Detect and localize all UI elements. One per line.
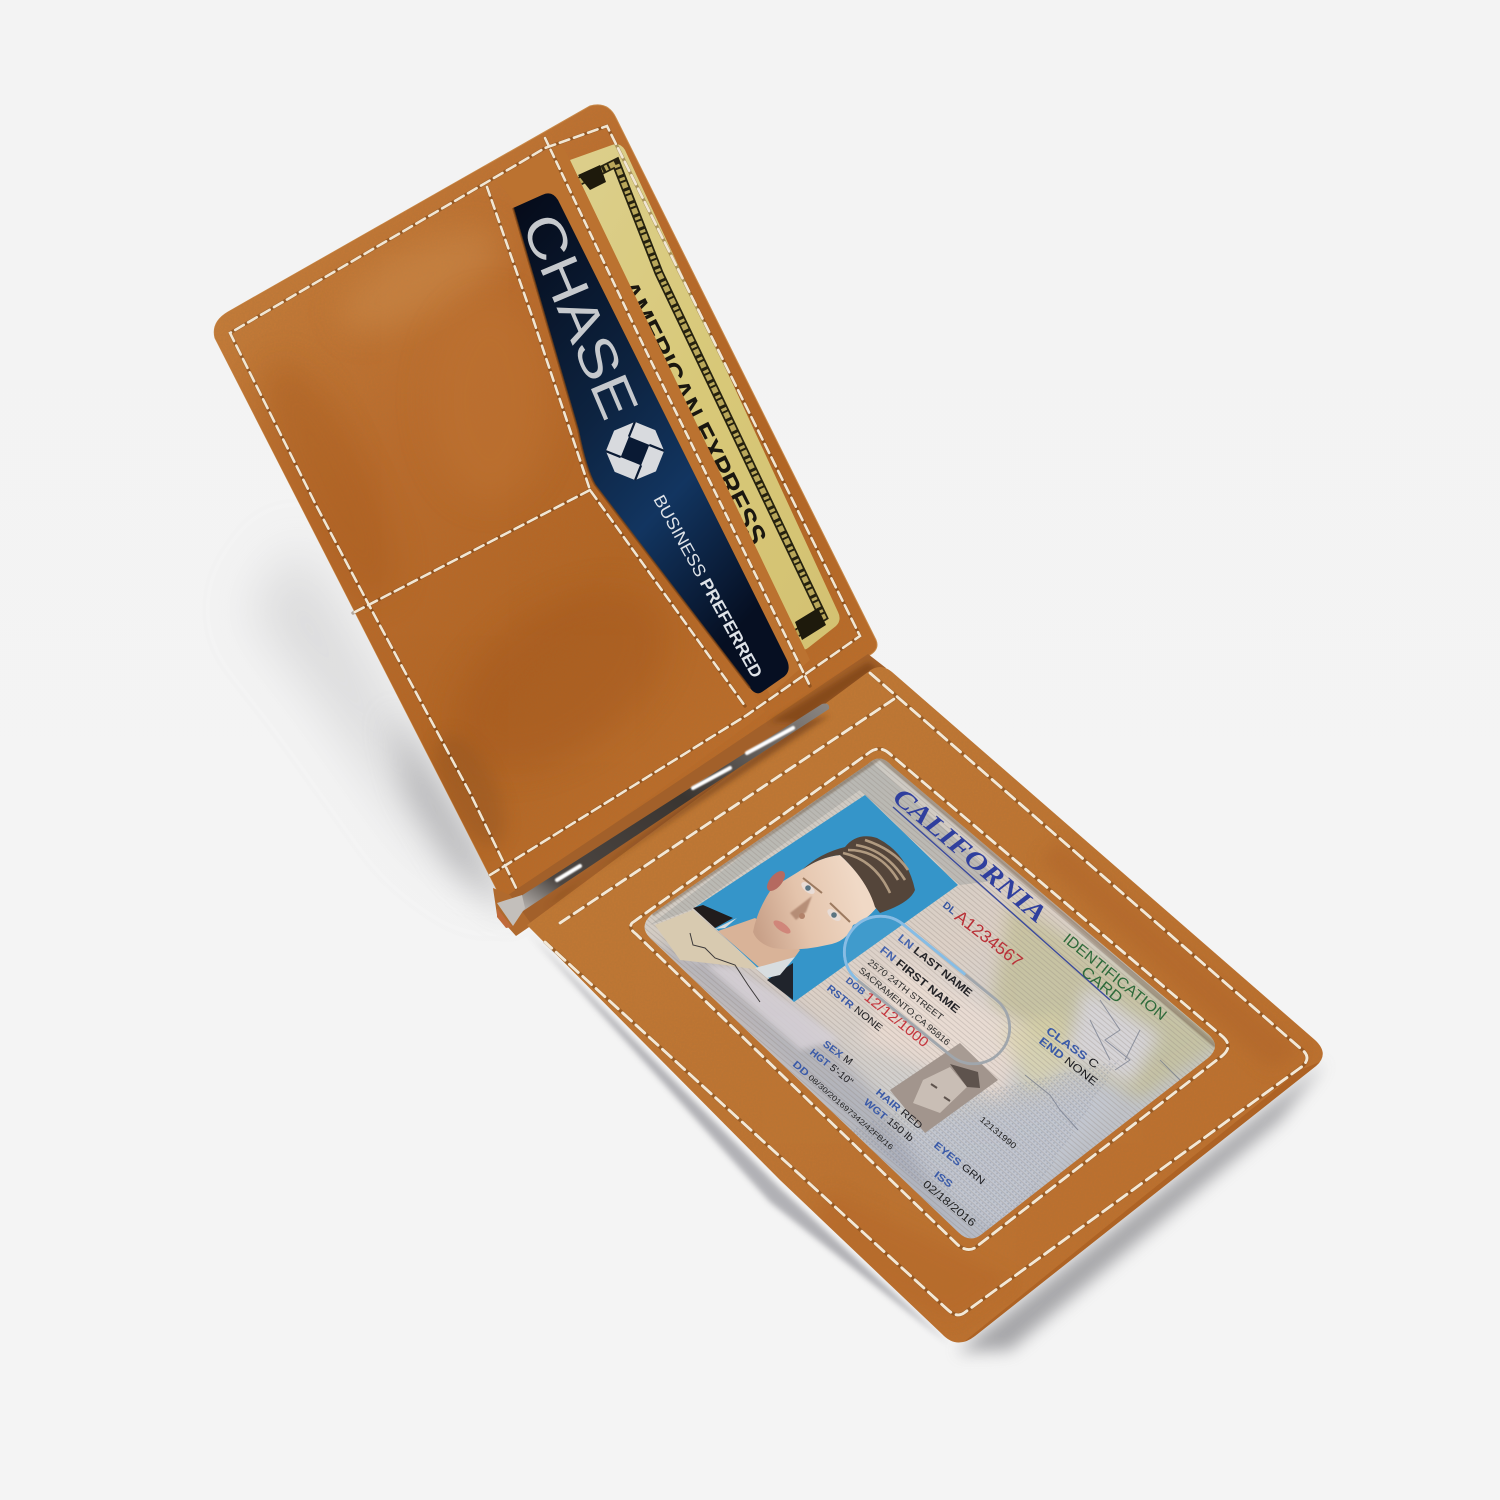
restriction: RSTR NONE bbox=[825, 983, 885, 1034]
pocket edge dark line bbox=[513, 208, 750, 688]
wallet product illustration bbox=[214, 104, 1323, 1360]
front pocket bbox=[214, 166, 765, 898]
chase wordmark: CHASE bbox=[510, 205, 650, 428]
window inner shadow bbox=[652, 757, 1216, 1046]
state title: CALIFORNIA bbox=[888, 782, 1052, 929]
first name: FN FIRST NAME bbox=[877, 944, 962, 1016]
map detail lines bbox=[1025, 1000, 1180, 1130]
ghost photo bbox=[890, 1043, 998, 1133]
lower leather mottling bbox=[816, 847, 1320, 1342]
brows bbox=[803, 878, 850, 922]
soft drop shadows bbox=[250, 540, 1325, 1352]
eyes: EYES GRN bbox=[932, 1140, 987, 1187]
clip highlights bbox=[557, 728, 793, 880]
ghost eyes bbox=[931, 1084, 950, 1101]
height: HGT 5'-10" bbox=[808, 1047, 855, 1088]
fold dark crease bbox=[770, 662, 878, 722]
stitching on the lower leaf bbox=[545, 673, 1307, 1315]
face bbox=[753, 855, 877, 949]
gold card bbox=[570, 144, 840, 649]
gold card ornamental border bbox=[580, 163, 823, 633]
issue label: ISS bbox=[932, 1170, 955, 1191]
hologram blue arc bbox=[830, 902, 965, 1031]
signature squiggle bbox=[690, 933, 760, 1002]
identification card label: IDENTIFICATION bbox=[1060, 930, 1170, 1024]
street address: 2570 24TH STREET bbox=[866, 957, 946, 1023]
hologram loop bbox=[830, 902, 1024, 1078]
hinge leather tip bbox=[493, 888, 532, 936]
neck bbox=[718, 918, 800, 968]
sex: SEX M bbox=[821, 1039, 854, 1068]
document discriminator: DD 08/30/201697342/42FB/16 bbox=[790, 1059, 896, 1152]
lower leather base bbox=[527, 667, 1323, 1343]
city: SACRAMENTO,CA 95816 bbox=[857, 965, 952, 1047]
panel: lower wallet leaf with ID window bbox=[510, 650, 1340, 1360]
hair bbox=[802, 836, 915, 913]
clip hinge end bbox=[497, 895, 525, 926]
cream strip bbox=[655, 910, 760, 970]
serial: 12131990 bbox=[978, 1114, 1019, 1151]
ghost hair bbox=[950, 1064, 980, 1088]
metal money clip bar bbox=[497, 704, 830, 928]
gold card corner ornaments bbox=[578, 165, 826, 640]
nose cast shadow bbox=[790, 896, 812, 920]
ghost face bbox=[913, 1067, 967, 1113]
issue date: 02/18/2016 bbox=[920, 1178, 978, 1229]
eyes bbox=[801, 882, 815, 894]
ID window card bbox=[640, 750, 1230, 1250]
nose tip bbox=[799, 913, 805, 919]
front pocket mottling bbox=[249, 233, 664, 848]
ear bbox=[767, 871, 785, 891]
photo: blue backdrop bbox=[694, 795, 958, 1002]
title underline bbox=[893, 807, 1110, 1000]
lips bbox=[774, 920, 790, 934]
leather base bbox=[214, 105, 877, 898]
gold card lettering: AMERICAN EXPRESS bbox=[613, 276, 773, 550]
shirt collar bbox=[715, 918, 795, 978]
clip shadow bbox=[545, 715, 830, 908]
stitching on the upper leaf bbox=[230, 126, 860, 890]
dark shoulder bbox=[693, 905, 733, 928]
hair highlights bbox=[843, 840, 908, 893]
card label: CARD bbox=[1078, 963, 1126, 1007]
chase octagon logo bbox=[606, 422, 664, 480]
end: END NONE bbox=[1036, 1035, 1100, 1088]
middle pocket leather strip bbox=[495, 146, 810, 695]
hinge orange tip bbox=[497, 908, 512, 928]
hair: HAIR RED bbox=[873, 1087, 924, 1132]
business preferred caption: BUSINESS PREFERRED bbox=[650, 492, 766, 681]
photo: portrait of man bbox=[693, 836, 915, 1000]
last name: LN LAST NAME bbox=[895, 932, 974, 1000]
navy chase card bbox=[510, 193, 789, 693]
lavender map area bbox=[697, 962, 838, 1051]
weight: WGT 150 lb bbox=[861, 1097, 916, 1145]
date of birth: DOB 12/12/1000 bbox=[842, 973, 932, 1050]
clip bar bbox=[510, 704, 829, 913]
licence number: DL A1234567 bbox=[938, 897, 1026, 971]
panel: upper wallet leaf with card pockets bbox=[200, 100, 900, 920]
fold between leaves bbox=[505, 654, 886, 925]
leather mottling bbox=[808, 504, 832, 551]
card tint areas bbox=[990, 900, 1230, 1100]
class: CLASS C bbox=[1043, 1025, 1101, 1071]
jacket bbox=[767, 963, 793, 1000]
